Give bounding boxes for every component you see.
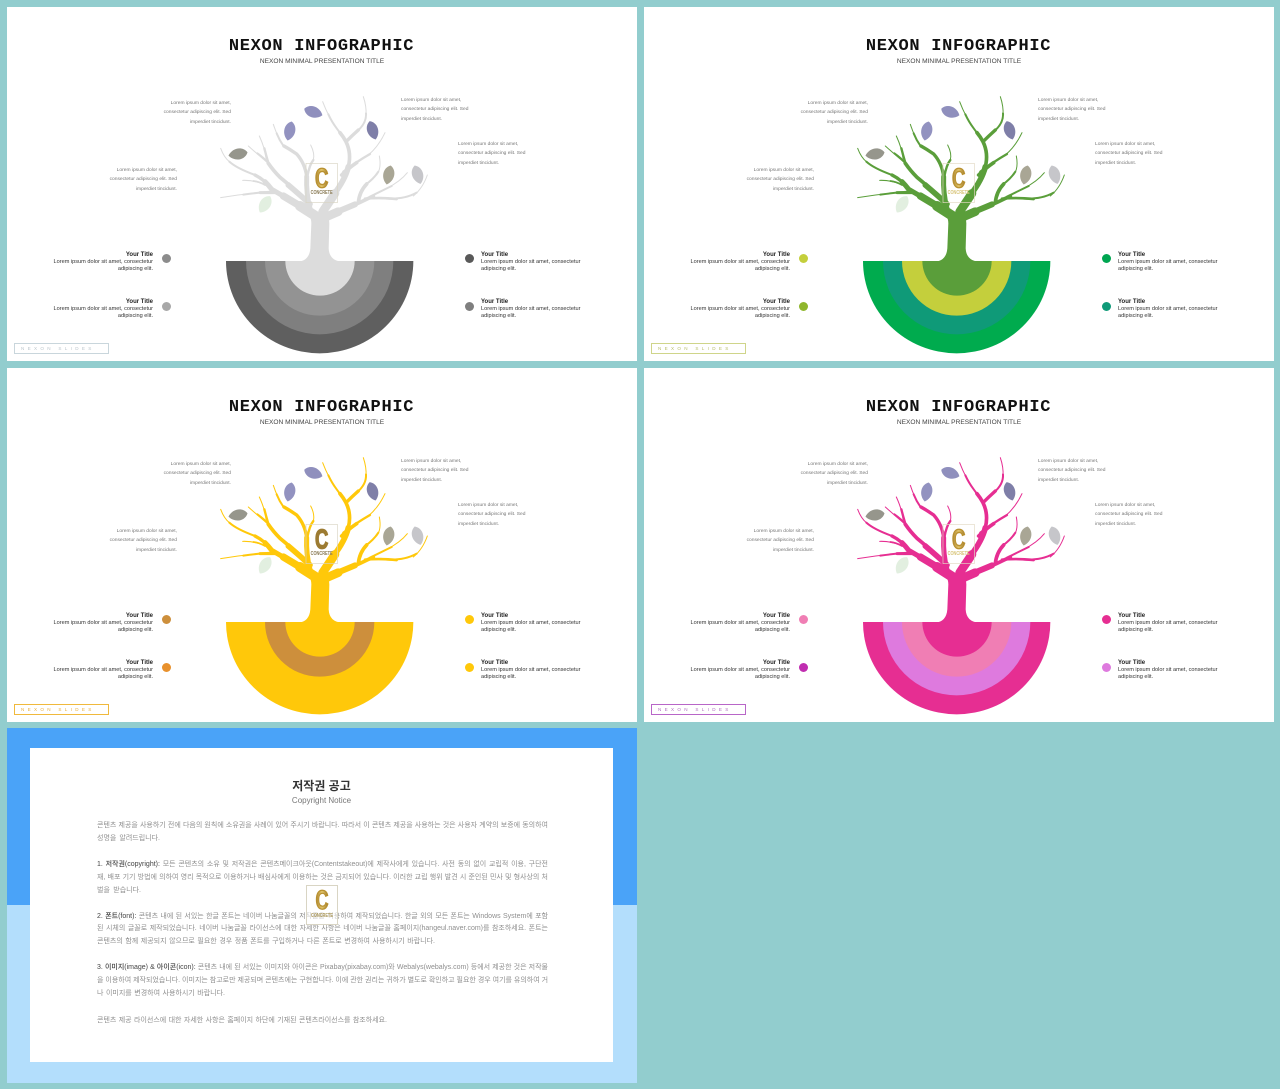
legend item right 2: Lorem ipsum dolor sit amet, consectetur <box>481 306 580 312</box>
subtitle: NEXON MINIMAL PRESENTATION TITLE <box>897 58 1021 65</box>
text block: upper right 2 <box>458 142 526 166</box>
legend item right 2 <box>1118 298 1218 319</box>
legend item left 2: Lorem ipsum dolor sit amet, consectetur <box>690 667 790 673</box>
text block: upper left 2: imperdiet tincidunt. <box>136 548 177 553</box>
text block: upper left 2 <box>110 168 177 192</box>
notice body text: 3. 이미지(image) & 아이콘(icon): 콘텐츠 내에 된 서있는 이미지와 아이콘은 Pixabay(pixabay.com)와 Webalys(webalys.com) 등에서 제공한 것은 저작물 <box>97 964 548 971</box>
text block: upper left 1: imperdiet tincidunt. <box>827 481 868 486</box>
legend item right 2: Your Title <box>1118 660 1145 666</box>
text block: upper right 2: consectetur adipiscing elit. Sed <box>1095 512 1162 517</box>
text block: upper right 1: consectetur adipiscing elit. Sed <box>1038 107 1105 112</box>
legend item left 2: Your Title <box>126 660 153 666</box>
text block: upper left 2: imperdiet tincidunt. <box>773 187 814 192</box>
tree chart with semicircle rings: CONCRETE <box>311 551 333 557</box>
legend dot right 1 <box>1102 254 1111 263</box>
footer tag: NEXON SLIDES <box>658 707 732 712</box>
legend item left 1: Your Title <box>126 612 153 618</box>
text block: upper right 1: imperdiet tincidunt. <box>401 478 442 483</box>
text block: upper left 1: imperdiet tincidunt. <box>827 120 868 125</box>
text block: upper left 2: imperdiet tincidunt. <box>773 548 814 553</box>
text block: upper right 1: Lorem ipsum dolor sit amet, <box>1038 458 1098 464</box>
notice body text: 나 이미지를 변경하여 사용하시기 바랍니다. <box>97 990 225 997</box>
notice subheading: Copyright Notice <box>292 796 351 805</box>
text block: upper left 2: Lorem ipsum dolor sit amet, <box>117 168 177 172</box>
legend item left 1: Lorem ipsum dolor sit amet, consectetur <box>54 259 153 265</box>
panel: green tree infographic <box>644 7 1274 361</box>
text block: upper right 2: imperdiet tincidunt. <box>1095 161 1136 166</box>
tree chart with semicircle rings: C <box>315 163 328 194</box>
legend item right 1: Lorem ipsum dolor sit amet, consectetur <box>1118 620 1218 626</box>
panel: grey tree infographic <box>7 7 637 361</box>
text block: upper left 2: consectetur adipiscing elit. Sed <box>110 177 177 182</box>
legend dot left 1 <box>162 254 171 263</box>
legend item right 1: Lorem ipsum dolor sit amet, consectetur <box>481 259 580 265</box>
text block: upper right 2: Lorem ipsum dolor sit amet, <box>458 142 518 146</box>
legend item left 2: adipiscing elit. <box>118 313 153 319</box>
text block: upper left 1: imperdiet tincidunt. <box>190 120 231 125</box>
text block: upper right 1: Lorem ipsum dolor sit amet, <box>401 458 461 464</box>
legend item right 1: adipiscing elit. <box>481 266 516 272</box>
title: NEXON INFOGRAPHIC <box>229 37 414 56</box>
legend item left 1: adipiscing elit. <box>755 266 790 272</box>
logo watermark: CONCRETE <box>311 913 334 919</box>
text block: upper left 1 <box>164 100 231 125</box>
text block: upper left 2: Lorem ipsum dolor sit amet, <box>754 168 814 172</box>
legend dot left 2 <box>799 302 808 311</box>
legend item left 1: Your Title <box>126 252 153 258</box>
logo watermark: C <box>316 885 328 915</box>
legend item left 1: Lorem ipsum dolor sit amet, consectetur <box>690 620 790 626</box>
title: NEXON INFOGRAPHIC <box>866 398 1051 417</box>
footer tag: NEXON SLIDES <box>21 346 95 351</box>
legend item left 1: adipiscing elit. <box>755 627 790 633</box>
text block: upper left 2: Lorem ipsum dolor sit amet, <box>754 528 814 534</box>
text block: upper left 1: consectetur adipiscing elit. Sed <box>801 110 868 115</box>
notice body text: 콘텐츠의 함께 제공되지 않으므로 필요한 경우 정품 폰트를 구입하거나 다른 폰트로 변경하여 사용하시기 바랍니다. <box>97 938 435 945</box>
legend item left 2: adipiscing elit. <box>755 313 790 319</box>
notice body text: 벌을 받습니다. <box>97 887 141 894</box>
notice body text: 콘텐츠 제공을 사용하기 전에 다음의 원칙에 소유권을 사례이 있어 주시기 바랍니다. 따라서 이 콘텐츠 제공을 사용하는 것은 사용자 계약의 보증에 동의하여 <box>97 822 548 829</box>
legend item right 2: Your Title <box>481 660 508 666</box>
legend dot left 2 <box>162 302 171 311</box>
legend item right 2: Lorem ipsum dolor sit amet, consectetur <box>1118 306 1218 312</box>
legend item left 2 <box>690 660 790 680</box>
legend dot right 1 <box>465 254 474 263</box>
legend item left 1 <box>54 252 153 272</box>
notice heading: 저작권 공고 <box>292 779 351 793</box>
legend dot left 2 <box>799 663 808 672</box>
legend item right 2: adipiscing elit. <box>481 674 516 680</box>
text block: upper right 2: Lorem ipsum dolor sit amet, <box>1095 142 1155 146</box>
legend item left 2: adipiscing elit. <box>755 674 790 680</box>
legend dot right 2 <box>1102 302 1111 311</box>
legend item left 2 <box>54 298 153 319</box>
legend item right 1: Your Title <box>481 252 508 258</box>
text block: upper left 2: imperdiet tincidunt. <box>136 187 177 192</box>
text block: upper left 1 <box>800 100 868 125</box>
legend item right 2 <box>1118 660 1218 680</box>
text block: upper left 2 <box>746 528 814 553</box>
legend item right 2: Your Title <box>481 298 508 304</box>
legend dot left 1 <box>162 615 171 624</box>
subtitle: NEXON MINIMAL PRESENTATION TITLE <box>260 58 384 65</box>
text block: upper right 2: consectetur adipiscing elit. Sed <box>458 512 525 517</box>
subtitle: NEXON MINIMAL PRESENTATION TITLE <box>260 419 384 426</box>
text block: upper left 2 <box>746 168 814 192</box>
legend item right 2 <box>481 660 580 680</box>
text block: upper left 1 <box>164 462 231 486</box>
legend item right 1: adipiscing elit. <box>1118 627 1153 633</box>
legend item left 1: Lorem ipsum dolor sit amet, consectetur <box>690 259 790 265</box>
text block: upper right 2: imperdiet tincidunt. <box>458 161 499 166</box>
legend item right 2: Lorem ipsum dolor sit amet, consectetur <box>1118 667 1218 673</box>
legend item left 1: Your Title <box>763 612 790 618</box>
legend item right 1: adipiscing elit. <box>1118 266 1153 272</box>
legend item right 2: adipiscing elit. <box>481 313 516 319</box>
notice body text: 된 시체의 글꼴로 제작되었습니다. 네이버 나눔글꼴 라이선스에 대한 자세한 사항은 네이버 나눔글꼴 홈페이지(hangeul.naver.com)를 참조하세요. 폰트는 <box>97 925 548 932</box>
tree chart with semicircle rings: CONCRETE <box>311 190 333 196</box>
tree chart with semicircle rings <box>857 457 1065 714</box>
text block: upper right 1 <box>1038 98 1106 122</box>
notice body text: 을 이용하여 제작되었습니다. 이미지는 참고로만 제공되며 콘텐츠에는 구현합니다. 이에 관한 권리는 귀하가 별도로 확인하고 필요한 경우 여기를 유의하여 거 <box>97 977 548 984</box>
text block: upper right 2 <box>458 502 526 527</box>
legend dot right 1 <box>465 615 474 624</box>
text block: upper left 1: consectetur adipiscing elit. Sed <box>164 110 231 115</box>
legend item left 2 <box>690 298 790 319</box>
tree chart with semicircle rings: C <box>952 163 965 194</box>
text block: upper right 2: imperdiet tincidunt. <box>458 522 499 527</box>
legend item left 2: Your Title <box>763 298 790 304</box>
text block: upper right 1: consectetur adipiscing elit. Sed <box>401 107 468 112</box>
legend item left 1: Lorem ipsum dolor sit amet, consectetur <box>54 620 153 626</box>
text block: upper left 1: Lorem ipsum dolor sit amet, <box>808 462 868 466</box>
text block: upper right 1 <box>401 458 468 483</box>
text block: upper left 1: consectetur adipiscing elit. Sed <box>801 471 868 476</box>
notice body text: 2. 폰트(font): 콘텐츠 내에 된 서있는 한글 폰트는 네이버 나눔글꼴의 저작물을 이용하여 제작되었습니다. 한글 외의 모든 폰트는 Windows System에 포함 <box>97 913 548 920</box>
panel: pink tree infographic <box>644 368 1274 722</box>
legend item right 2: adipiscing elit. <box>1118 313 1153 319</box>
notice body text: 1. 저작권(copyright): 모든 콘텐츠의 소유 및 저작권은 콘텐츠메이크아웃(Contentstakeout)에 제작사에게 있습니다. 사전 동의 없이 교립적 이용, 구단전 <box>97 861 548 868</box>
logo watermark <box>306 885 338 925</box>
text block: upper right 2: imperdiet tincidunt. <box>1095 522 1136 527</box>
footer tag <box>14 704 109 715</box>
text block: upper right 1: imperdiet tincidunt. <box>1038 117 1079 122</box>
legend dot left 1 <box>799 615 808 624</box>
legend item left 1: adipiscing elit. <box>118 266 153 272</box>
legend item right 1: Your Title <box>481 612 508 618</box>
legend item right 1: adipiscing elit. <box>481 627 516 633</box>
text block: upper right 1 <box>1038 458 1106 483</box>
tree chart with semicircle rings: C <box>315 524 328 555</box>
title: NEXON INFOGRAPHIC <box>229 398 414 417</box>
footer tag <box>14 343 109 354</box>
legend item right 2: Your Title <box>1118 298 1145 304</box>
text block: upper left 2: consectetur adipiscing elit. Sed <box>747 177 814 182</box>
footer tag: NEXON SLIDES <box>658 346 732 351</box>
text block: upper left 2: consectetur adipiscing elit. Sed <box>110 538 177 543</box>
text block: upper left 1: Lorem ipsum dolor sit amet, <box>808 100 868 106</box>
legend item right 1: Lorem ipsum dolor sit amet, consectetur <box>481 620 580 626</box>
legend item left 1: Your Title <box>763 252 790 258</box>
tree chart with semicircle rings: CONCRETE <box>948 551 970 557</box>
legend item right 2: adipiscing elit. <box>1118 674 1153 680</box>
legend item right 1: Your Title <box>1118 612 1145 618</box>
legend item right 1: Your Title <box>1118 252 1145 258</box>
text block: upper right 2 <box>1095 502 1162 527</box>
legend item right 1 <box>1118 612 1218 633</box>
tree chart with semicircle rings <box>220 96 428 354</box>
white sheet <box>30 748 613 1062</box>
notice body text: 재, 배포 기기 방법에 의하여 영리 목적으로 이용하거나 배심사에게 이용하는 것은 금지되어 있습니다. 이러한 교립 행위 발견 시 준인된 민사 및 형사상의 처 <box>97 874 548 881</box>
text block: upper left 2: consectetur adipiscing elit. Sed <box>747 538 814 543</box>
title: NEXON INFOGRAPHIC <box>866 37 1051 56</box>
legend item left 2: Your Title <box>126 298 153 304</box>
text block: upper right 1: imperdiet tincidunt. <box>401 117 442 122</box>
notice body text: 성명을 알려드립니다. <box>97 835 160 842</box>
legend dot left 1 <box>799 254 808 263</box>
text block: upper right 2: consectetur adipiscing elit. Sed <box>1095 151 1162 156</box>
text block: upper left 1: consectetur adipiscing elit. Sed <box>164 471 231 476</box>
text block: upper right 2: Lorem ipsum dolor sit amet, <box>1095 502 1155 508</box>
legend dot right 2 <box>465 302 474 311</box>
text block: upper right 1 <box>401 98 468 122</box>
legend item right 1 <box>481 612 580 633</box>
footer tag: NEXON SLIDES <box>21 707 95 712</box>
notice body text: 콘텐츠 제공 라이선스에 대한 자세한 사항은 홈페이지 하단에 기재된 콘텐츠라이선스를 참조하세요. <box>97 1017 387 1024</box>
text block: upper right 1: imperdiet tincidunt. <box>1038 478 1079 483</box>
legend item left 1 <box>690 252 790 272</box>
legend dot left 2 <box>162 663 171 672</box>
text block: upper left 2 <box>110 528 177 553</box>
footer tag <box>651 704 746 715</box>
legend item left 1: adipiscing elit. <box>118 627 153 633</box>
text block: upper right 1: consectetur adipiscing elit. Sed <box>401 468 468 473</box>
tree chart with semicircle rings <box>220 457 428 714</box>
legend dot right 1 <box>1102 615 1111 624</box>
panel: copyright notice background <box>7 728 637 1083</box>
text block: upper left 1: Lorem ipsum dolor sit amet, <box>171 462 231 466</box>
text block: upper right 2: Lorem ipsum dolor sit amet, <box>458 502 518 508</box>
legend item right 2 <box>481 298 580 319</box>
legend item left 1 <box>54 612 153 633</box>
legend item left 2: Lorem ipsum dolor sit amet, consectetur <box>54 306 153 312</box>
legend dot right 2 <box>1102 663 1111 672</box>
legend item left 2: Your Title <box>763 660 790 666</box>
tree chart with semicircle rings: C <box>952 524 965 555</box>
panel: yellow tree infographic <box>7 368 637 722</box>
text block: upper left 2: Lorem ipsum dolor sit amet, <box>117 528 177 534</box>
text block: upper left 1 <box>800 462 868 486</box>
text block: upper right 2: consectetur adipiscing elit. Sed <box>458 151 525 156</box>
legend item left 1 <box>690 612 790 633</box>
text block: upper left 1: imperdiet tincidunt. <box>190 481 231 486</box>
legend item left 2: Lorem ipsum dolor sit amet, consectetur <box>690 306 790 312</box>
legend item right 2: Lorem ipsum dolor sit amet, consectetur <box>481 667 580 673</box>
legend item right 1: Lorem ipsum dolor sit amet, consectetur <box>1118 259 1218 265</box>
text block: upper right 1: Lorem ipsum dolor sit amet, <box>1038 98 1098 102</box>
legend item left 2: Lorem ipsum dolor sit amet, consectetur <box>54 667 153 673</box>
text block: upper left 1: Lorem ipsum dolor sit amet, <box>171 100 231 106</box>
legend item left 2: adipiscing elit. <box>118 674 153 680</box>
subtitle: NEXON MINIMAL PRESENTATION TITLE <box>897 419 1021 426</box>
tree chart with semicircle rings: CONCRETE <box>948 190 970 196</box>
legend item right 1 <box>481 252 580 272</box>
tree chart with semicircle rings <box>857 96 1065 354</box>
legend dot right 2 <box>465 663 474 672</box>
footer tag <box>651 343 746 354</box>
text block: upper right 2 <box>1095 142 1162 166</box>
legend item right 1 <box>1118 252 1218 272</box>
legend item left 2 <box>54 660 153 680</box>
text block: upper right 1: consectetur adipiscing elit. Sed <box>1038 468 1105 473</box>
text block: upper right 1: Lorem ipsum dolor sit amet, <box>401 98 461 102</box>
